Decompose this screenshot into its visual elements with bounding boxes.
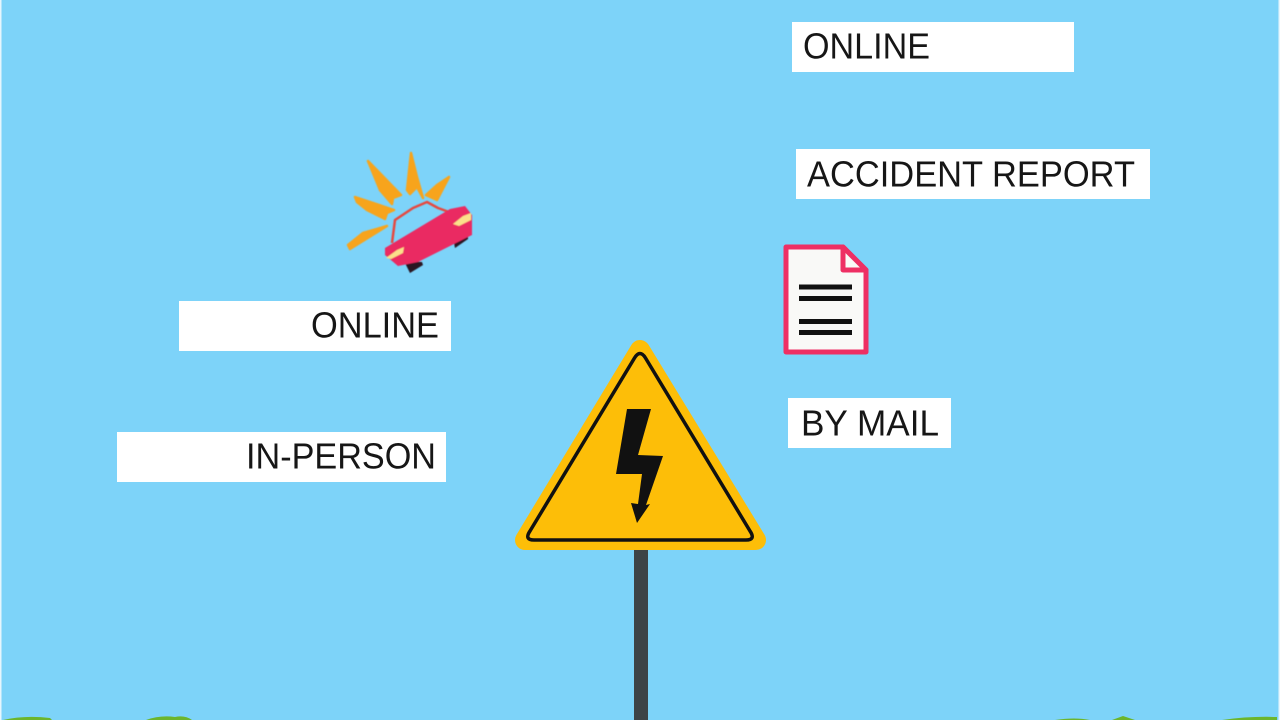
icon: crashed car with impact burst (348, 153, 472, 273)
document corner fold (843, 247, 866, 270)
lightning bolt (616, 409, 663, 523)
car roof outline (392, 202, 449, 243)
car headlights (386, 247, 404, 259)
label: accident report: ACCIDENT REPORT (807, 154, 1135, 194)
icon: warning sign (525, 350, 756, 540)
label: online (left): ONLINE (311, 304, 439, 346)
document text lines (799, 284, 852, 335)
label: online (top right) (792, 22, 1074, 72)
label: online (left) (179, 301, 451, 351)
frame edges (0, 0, 2, 720)
sign inner border (528, 354, 752, 540)
grass at bottom edge (3, 716, 1277, 720)
impact rays (348, 153, 449, 249)
label: in-person (117, 432, 446, 482)
car wheels (404, 261, 423, 273)
label: by mail: BY MAIL (801, 402, 939, 444)
label: in-person: IN-PERSON (246, 436, 436, 476)
icon: sign post (634, 548, 648, 720)
car body (385, 206, 472, 266)
label: online (top right): ONLINE (803, 26, 930, 66)
icon: document (786, 247, 866, 352)
